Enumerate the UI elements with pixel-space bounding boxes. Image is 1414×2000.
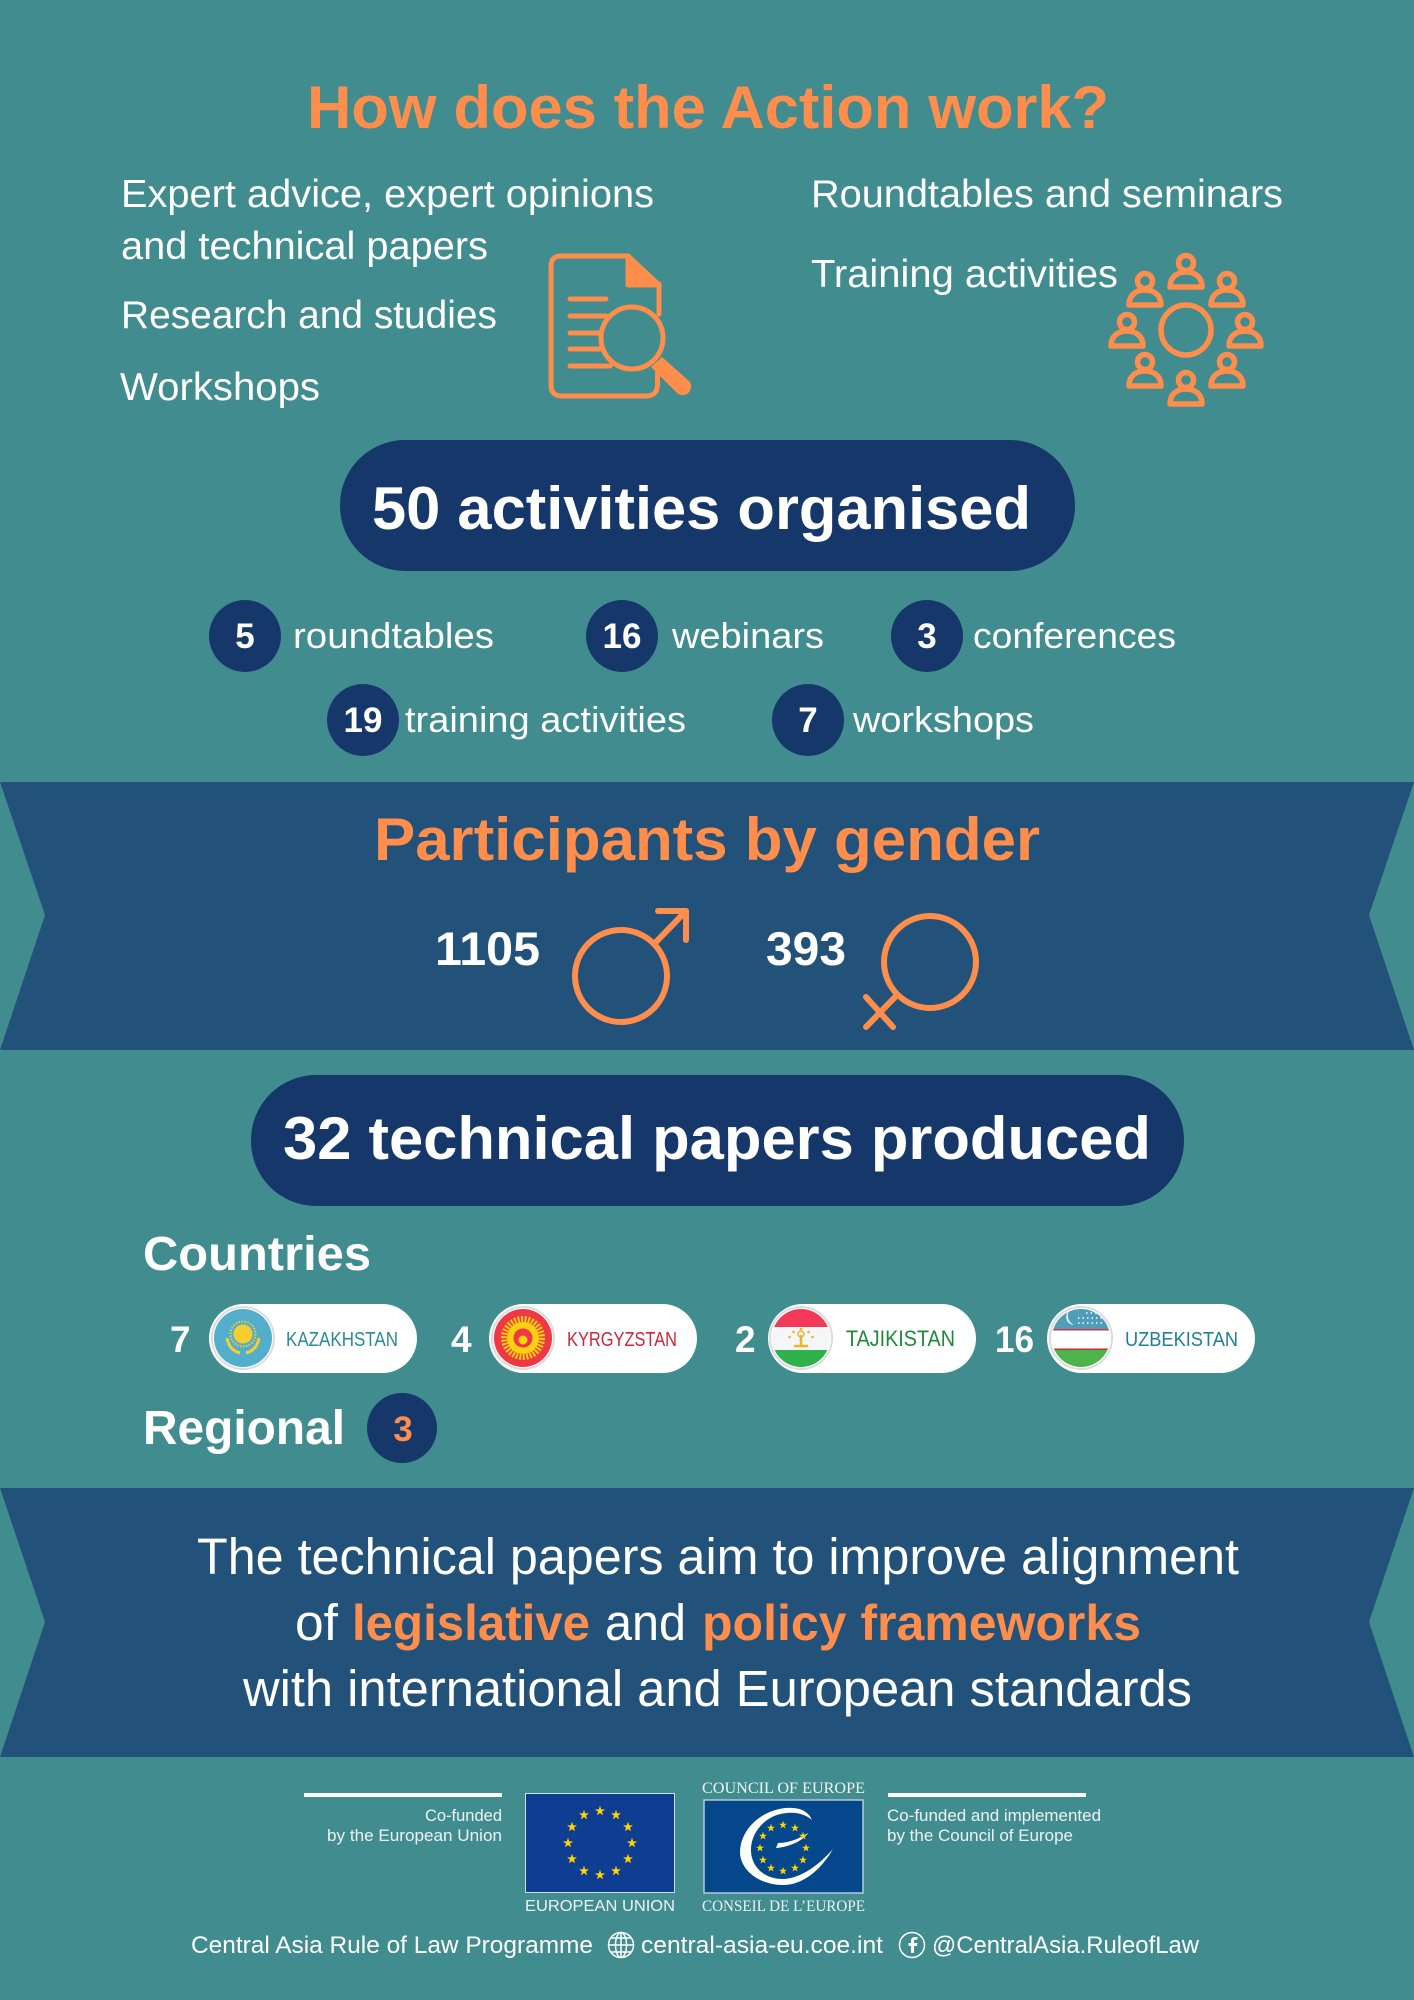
country: Kazakhstan: 7: [170, 1319, 191, 1360]
statement text: [197, 1528, 1239, 1717]
icon: male symbol: [575, 911, 686, 1022]
country: Kyrgyzstan: 4: [451, 1319, 472, 1360]
text block: left activities: [120, 173, 654, 409]
icon: facebook: [900, 1932, 924, 1958]
footer: website: central-asia-eu.coe.int: [641, 1932, 883, 1959]
panel: participants by gender: [0, 782, 1414, 1050]
statement text: and: [605, 1594, 686, 1651]
headline pill: 50 activities: [340, 440, 1075, 571]
stat: conferences: conferences: [973, 615, 1176, 656]
statement text: of: [295, 1594, 339, 1651]
country: Kyrgyzstan: [451, 1304, 697, 1373]
stat: roundtables: 5: [235, 617, 255, 656]
title: How does the Action work?: [307, 74, 1109, 141]
headline pill: 32 technical papers: [251, 1075, 1184, 1206]
stat: roundtables: [209, 600, 494, 672]
country: Kyrgyzstan: KYRGYZSTAN: [567, 1329, 677, 1351]
country: Tajikistan: TAJIKISTAN: [846, 1326, 955, 1351]
text block: left activities: Expert advice, expert opinions: [121, 173, 654, 216]
footer: social handle: @CentralAsia.RuleofLaw: [932, 1932, 1200, 1959]
headline pill: 50 activities: 50 activities organised: [372, 475, 1031, 542]
country: Uzbekistan: [995, 1304, 1255, 1373]
icon: document with magnifier: [551, 256, 691, 396]
stat: workshops: 7: [798, 701, 818, 740]
text block: right activities: [811, 173, 1283, 296]
statement text: legislative: [352, 1595, 590, 1651]
number: female participants: 393: [766, 922, 846, 975]
stat: roundtables: roundtables: [293, 615, 494, 656]
logo: European Union: EUROPEAN UNION: [525, 1898, 675, 1915]
country: Tajikistan: [735, 1304, 976, 1373]
icon: female symbol: [866, 916, 976, 1027]
panel: technical papers aim: [0, 1488, 1414, 1757]
text: co-funded by the Council of Europe: by the Council of Europe: [887, 1827, 1073, 1845]
statement text: The technical papers aim to improve alignment: [197, 1528, 1239, 1585]
country: Kazakhstan: [170, 1304, 417, 1373]
stat: training activities: 19: [344, 701, 382, 740]
text: co-funded by the European Union: Co-funded: [425, 1807, 502, 1825]
regional count: 3: [393, 1410, 413, 1449]
text block: left activities: Research and studies: [121, 294, 497, 337]
logo: Council of Europe: COUNCIL OF EUROPE: [702, 1780, 865, 1797]
stat: workshops: workshops: [852, 699, 1034, 740]
text block: left activities: Workshops: [120, 366, 320, 409]
text block: right activities: Training activities: [811, 253, 1118, 296]
headline pill: 32 technical papers: 32 technical papers produced: [283, 1105, 1151, 1172]
logo: Council of Europe: CONSEIL DE L’EUROPE: [702, 1898, 865, 1915]
statement text: policy frameworks: [702, 1595, 1141, 1651]
logo: European Union: [525, 1794, 675, 1915]
number: male participants: 1105: [435, 922, 540, 975]
stat: webinars: [586, 600, 824, 672]
regional count: Regional: [143, 1402, 345, 1455]
text: co-funded by the European Union: by the European Union: [327, 1827, 502, 1845]
country: Tajikistan: 2: [735, 1319, 756, 1360]
stat: webinars: webinars: [671, 615, 824, 656]
stat: webinars: 16: [603, 617, 641, 656]
text: co-funded by the Council of Europe: [887, 1793, 1101, 1845]
statement text: with international and European standards: [242, 1660, 1192, 1717]
stat: training activities: training activities: [405, 699, 686, 740]
country: Uzbekistan: UZBEKISTAN: [1125, 1329, 1238, 1351]
country: Kazakhstan: KAZAKHSTAN: [286, 1329, 398, 1351]
icon: people around table: [1111, 256, 1261, 404]
heading: participants by gender: Participants by gender: [374, 806, 1040, 873]
regional count: [143, 1393, 437, 1463]
icon: globe: [608, 1932, 634, 1958]
text: co-funded by the European Union: [304, 1793, 502, 1845]
stat: conferences: [891, 600, 1176, 672]
logo: Council of Europe: [702, 1780, 865, 1915]
stat: training activities: [327, 684, 686, 756]
text block: right activities: Roundtables and seminars: [811, 173, 1283, 216]
text block: left activities: and technical papers: [121, 225, 488, 268]
heading: countries: Countries: [143, 1228, 371, 1281]
country: Uzbekistan: 16: [995, 1319, 1034, 1360]
footer: programme name: Central Asia Rule of Law Programme: [191, 1932, 593, 1959]
stat: workshops: [772, 684, 1034, 756]
stat: conferences: 3: [917, 617, 937, 656]
text: co-funded by the Council of Europe: Co-funded and implemented: [887, 1807, 1101, 1825]
